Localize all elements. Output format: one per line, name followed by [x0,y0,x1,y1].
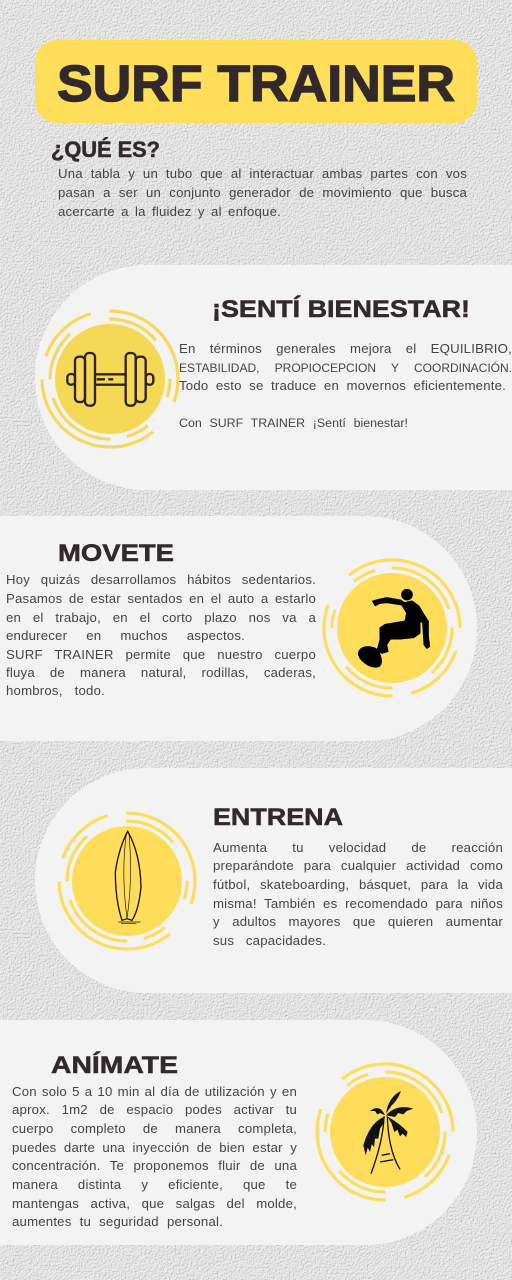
text block: entrena: sus capacidades. [213,933,326,948]
text block: movete: en el trabajo, en el corto plazo nos va a [6,610,316,625]
text block: ¿Qué es?: acercarte a la fluidez y al enfoque. [58,204,281,219]
icon: palm tree in yellow circle [315,1062,455,1202]
text block: sentí bienestar: Todo esto se traduce en movernos eficientemente. [179,378,506,393]
text block: sentí bienestar [179,341,512,430]
text block: anímate: aprox. 1m2 de espacio podes activar tu [12,1102,297,1117]
text block: anímate: Con solo 5 a 10 min al día de utilización y en [12,1084,297,1099]
text block: entrena: fútbol, skateboarding, básquet, para la vida [213,877,503,892]
text block: entrena: Aumenta tu velocidad de reacción [213,840,503,855]
icon: surfboard in yellow circle [57,811,197,951]
heading: movete: MOVETE [58,540,174,567]
text block: movete: hombros, todo. [6,683,105,698]
icon: dumbbell in yellow circle [40,309,180,449]
heading: sentí bienestar: ¡SENTÍ BIENESTAR! [212,295,470,323]
text block: anímate [12,1084,297,1229]
text block: anímate: cuerpo completo de manera completa, [12,1121,297,1136]
title banner [35,40,477,123]
text block: movete: Pasamos de estar sentados en el auto a estarlo [6,591,316,606]
text block: movete: Hoy quizás desarrollamos hábitos sedentarios. [6,572,316,587]
text block: sentí bienestar: ESTABILIDAD, PROPIOCEPCION Y COORDINACIÓN. [179,361,512,375]
title: SURF TRAINER [57,55,455,111]
text block: entrena: preparándote para cualquier actividad como [213,858,503,873]
text block: sentí bienestar: Con SURF TRAINER ¡Sentí bienestar! [179,416,408,430]
heading: entrena: ENTRENA [213,804,343,831]
text block: movete: SURF TRAINER permite que nuestro cuerpo [6,647,316,662]
text block: anímate: aumentes tu seguridad personal. [12,1214,223,1229]
text block: movete [6,572,316,698]
panel: anímate [0,1020,477,1245]
heading: ¿Qué es?: ¿QUÉ ES? [51,137,160,162]
icon: surfer silhouette in yellow circle [322,558,462,698]
text block: entrena [213,840,503,948]
text block: sentí bienestar: En términos generales mejora el EQUILIBRIO, [179,341,512,356]
text block: anímate: mantengas activa, que salgas del molde, [12,1196,297,1211]
text block: anímate: puedes darte una inyección de bien estar y [12,1140,297,1155]
text block: ¿Qué es?: pasan a ser un conjunto generador de movimiento que busca [58,185,467,200]
text block: ¿Qué es?: Una tabla y un tubo que al interactuar ambas partes con vos [58,166,467,181]
panel: movete [0,516,477,741]
text block: ¿Qué es? [58,166,467,219]
text block: anímate: concentración. Te proponemos fluir de una [12,1158,297,1173]
text block: entrena: y adultos mayores que quieren aumentar [213,914,503,929]
text block: entrena: misma! También es recomendado para niños [213,896,503,911]
heading: anímate: ANÍMATE [51,1051,178,1079]
text block: movete: endurecer en muchos aspectos. [6,628,245,643]
panel: sentí bienestar [35,265,512,490]
panel: entrena [35,768,512,993]
text block: movete: fluya de manera natural, rodillas, caderas, [6,665,316,680]
text block: anímate: manera distinta y eficiente, que te [12,1177,297,1192]
